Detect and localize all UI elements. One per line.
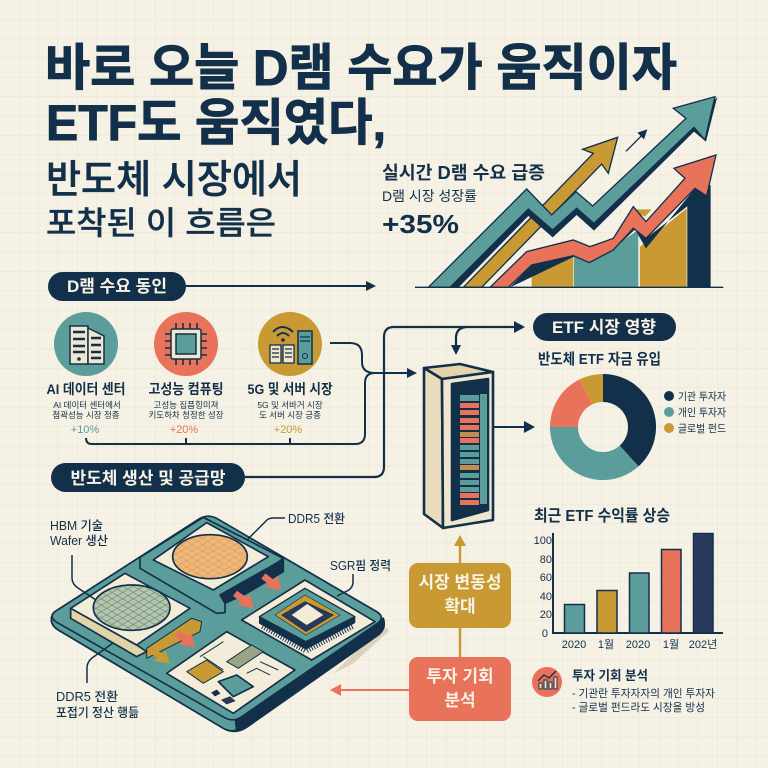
driver: AI data center [46,312,126,436]
isometric semiconductor platform [51,516,389,731]
platform labels and leader lines: SGR핌 정력 [330,559,391,573]
box: market volatility [409,535,511,657]
bar chart: 202년 [689,638,717,651]
donut heading: 반도체 ETF 자금 유입 [538,351,661,368]
donut legend: 기관 투자자 [678,391,726,403]
arrow: server to donut [494,421,535,433]
top wafer tile [140,517,283,613]
growth callout: D램 시장 성장률 [382,188,477,204]
bar chart: 1월 [598,638,614,651]
bar chart: 80 [540,554,552,566]
bar chart: 100 [534,535,552,547]
title [45,40,677,151]
heading pill: 반도체 생산 및 공급망 [51,463,245,492]
driver: 5G and servers: 5G 및 서바거 시장 [257,400,323,410]
platform labels and leader lines: DDR5 전환 [56,690,119,704]
box: market volatility: 확대 [444,597,476,616]
bar chart: 20 [540,609,552,621]
platform labels and leader lines: DDR5 전환 [288,512,345,526]
driver: AI data center: +10% [71,424,99,436]
driver: AI data center: AI 데이터 센터에서 [53,400,121,410]
opportunity text: - 기관란 투자자자의 개인 투자자 [572,687,715,700]
box: investment opportunity: 분석 [444,691,476,710]
icon: opportunity chart [532,667,562,697]
box: investment opportunity [409,657,511,721]
icon: server rack [424,364,493,528]
donut legend [664,391,726,435]
bar chart [534,533,723,651]
growth arrows chart [415,97,723,287]
box: market volatility: 시장 변동성 [419,573,501,592]
heading pill: ETF 시장 영향 [533,313,676,341]
process arrows [150,576,282,663]
title: 바로 오늘 D램 수요가 움직이자 [45,40,677,96]
box: investment opportunity: 투자 기회 [426,667,494,686]
donut legend: 개인 투자자 [678,407,726,419]
driver: AI data center: AI 데이터 센터 [46,381,126,397]
platform base [51,617,384,731]
bar chart: 2020 [626,639,650,651]
driver: high performance computing: 키도하차 청정한 성장 [148,410,224,420]
subtitle [46,159,302,241]
driver: high performance computing: +20% [170,424,198,436]
bar chart: 1월 [663,638,679,651]
driver: AI data center: 첨곽성능 시장 정종 [52,410,120,420]
platform labels and leader lines: Wafer 생산 [50,534,108,548]
driver: 5G and servers [248,312,333,436]
bar chart: 40 [540,591,552,603]
icon: data center [54,312,118,376]
chip tile [242,580,375,660]
driver: 5G and servers: 5G 및 서버 시장 [248,381,333,397]
platform labels and leader lines: HBM 기술 [50,519,103,533]
platform top [52,516,381,720]
icon: wifi and servers [258,312,322,376]
growth callout: +35% [382,209,459,239]
driver: 5G and servers: 도 서버 시장 긍종 [259,410,321,420]
platform labels and leader lines [50,512,391,720]
driver: high performance computing [148,312,224,436]
opportunity text: 투자 기회 분석 [572,668,648,683]
title: ETF도 움직였다, [46,95,386,151]
bar chart: 60 [540,572,552,584]
arrow: opportunity to platform [330,684,409,696]
icon: chip [154,312,218,376]
heading pill: ETF 시장 영향: ETF 시장 영향 [552,318,656,337]
bar chart: 2020 [562,639,586,651]
platform labels and leader lines: 포접기 정산 행듦 [56,705,139,720]
growth callout: 실시간 D램 수요 급증 [382,163,545,183]
subtitle: 반도체 시장에서 [46,159,302,202]
subtitle: 포착된 이 흐름은 [46,205,276,241]
heading pill: 반도체 생산 및 공급망: 반도체 생산 및 공급망 [71,469,226,488]
bar chart heading: 최근 ETF 수익률 상승 [534,507,670,525]
donut chart [550,374,656,480]
left wafer tile [71,573,202,658]
arrow: demand drivers [186,281,376,291]
opportunity text [572,668,715,714]
connector: supply chain to ETF [245,321,525,477]
driver: 5G and servers: +20% [274,424,302,436]
circuit tile [167,632,295,713]
growth callout [382,163,545,239]
driver: high performance computing: 고성능 집픔힝미져 [154,400,218,410]
heading pill: D램 수요 동인: D램 수요 동인 [67,277,167,296]
driver: high performance computing: 고성능 컴퓨팅 [148,381,224,397]
opportunity text: - 글로벌 펀드라도 시장을 방성 [572,701,705,714]
heading pill: D램 수요 동인 [48,272,186,301]
bar chart: 0 [542,628,548,640]
donut legend: 글로벌 펀드 [678,423,726,435]
connector: drivers to server [86,343,417,444]
